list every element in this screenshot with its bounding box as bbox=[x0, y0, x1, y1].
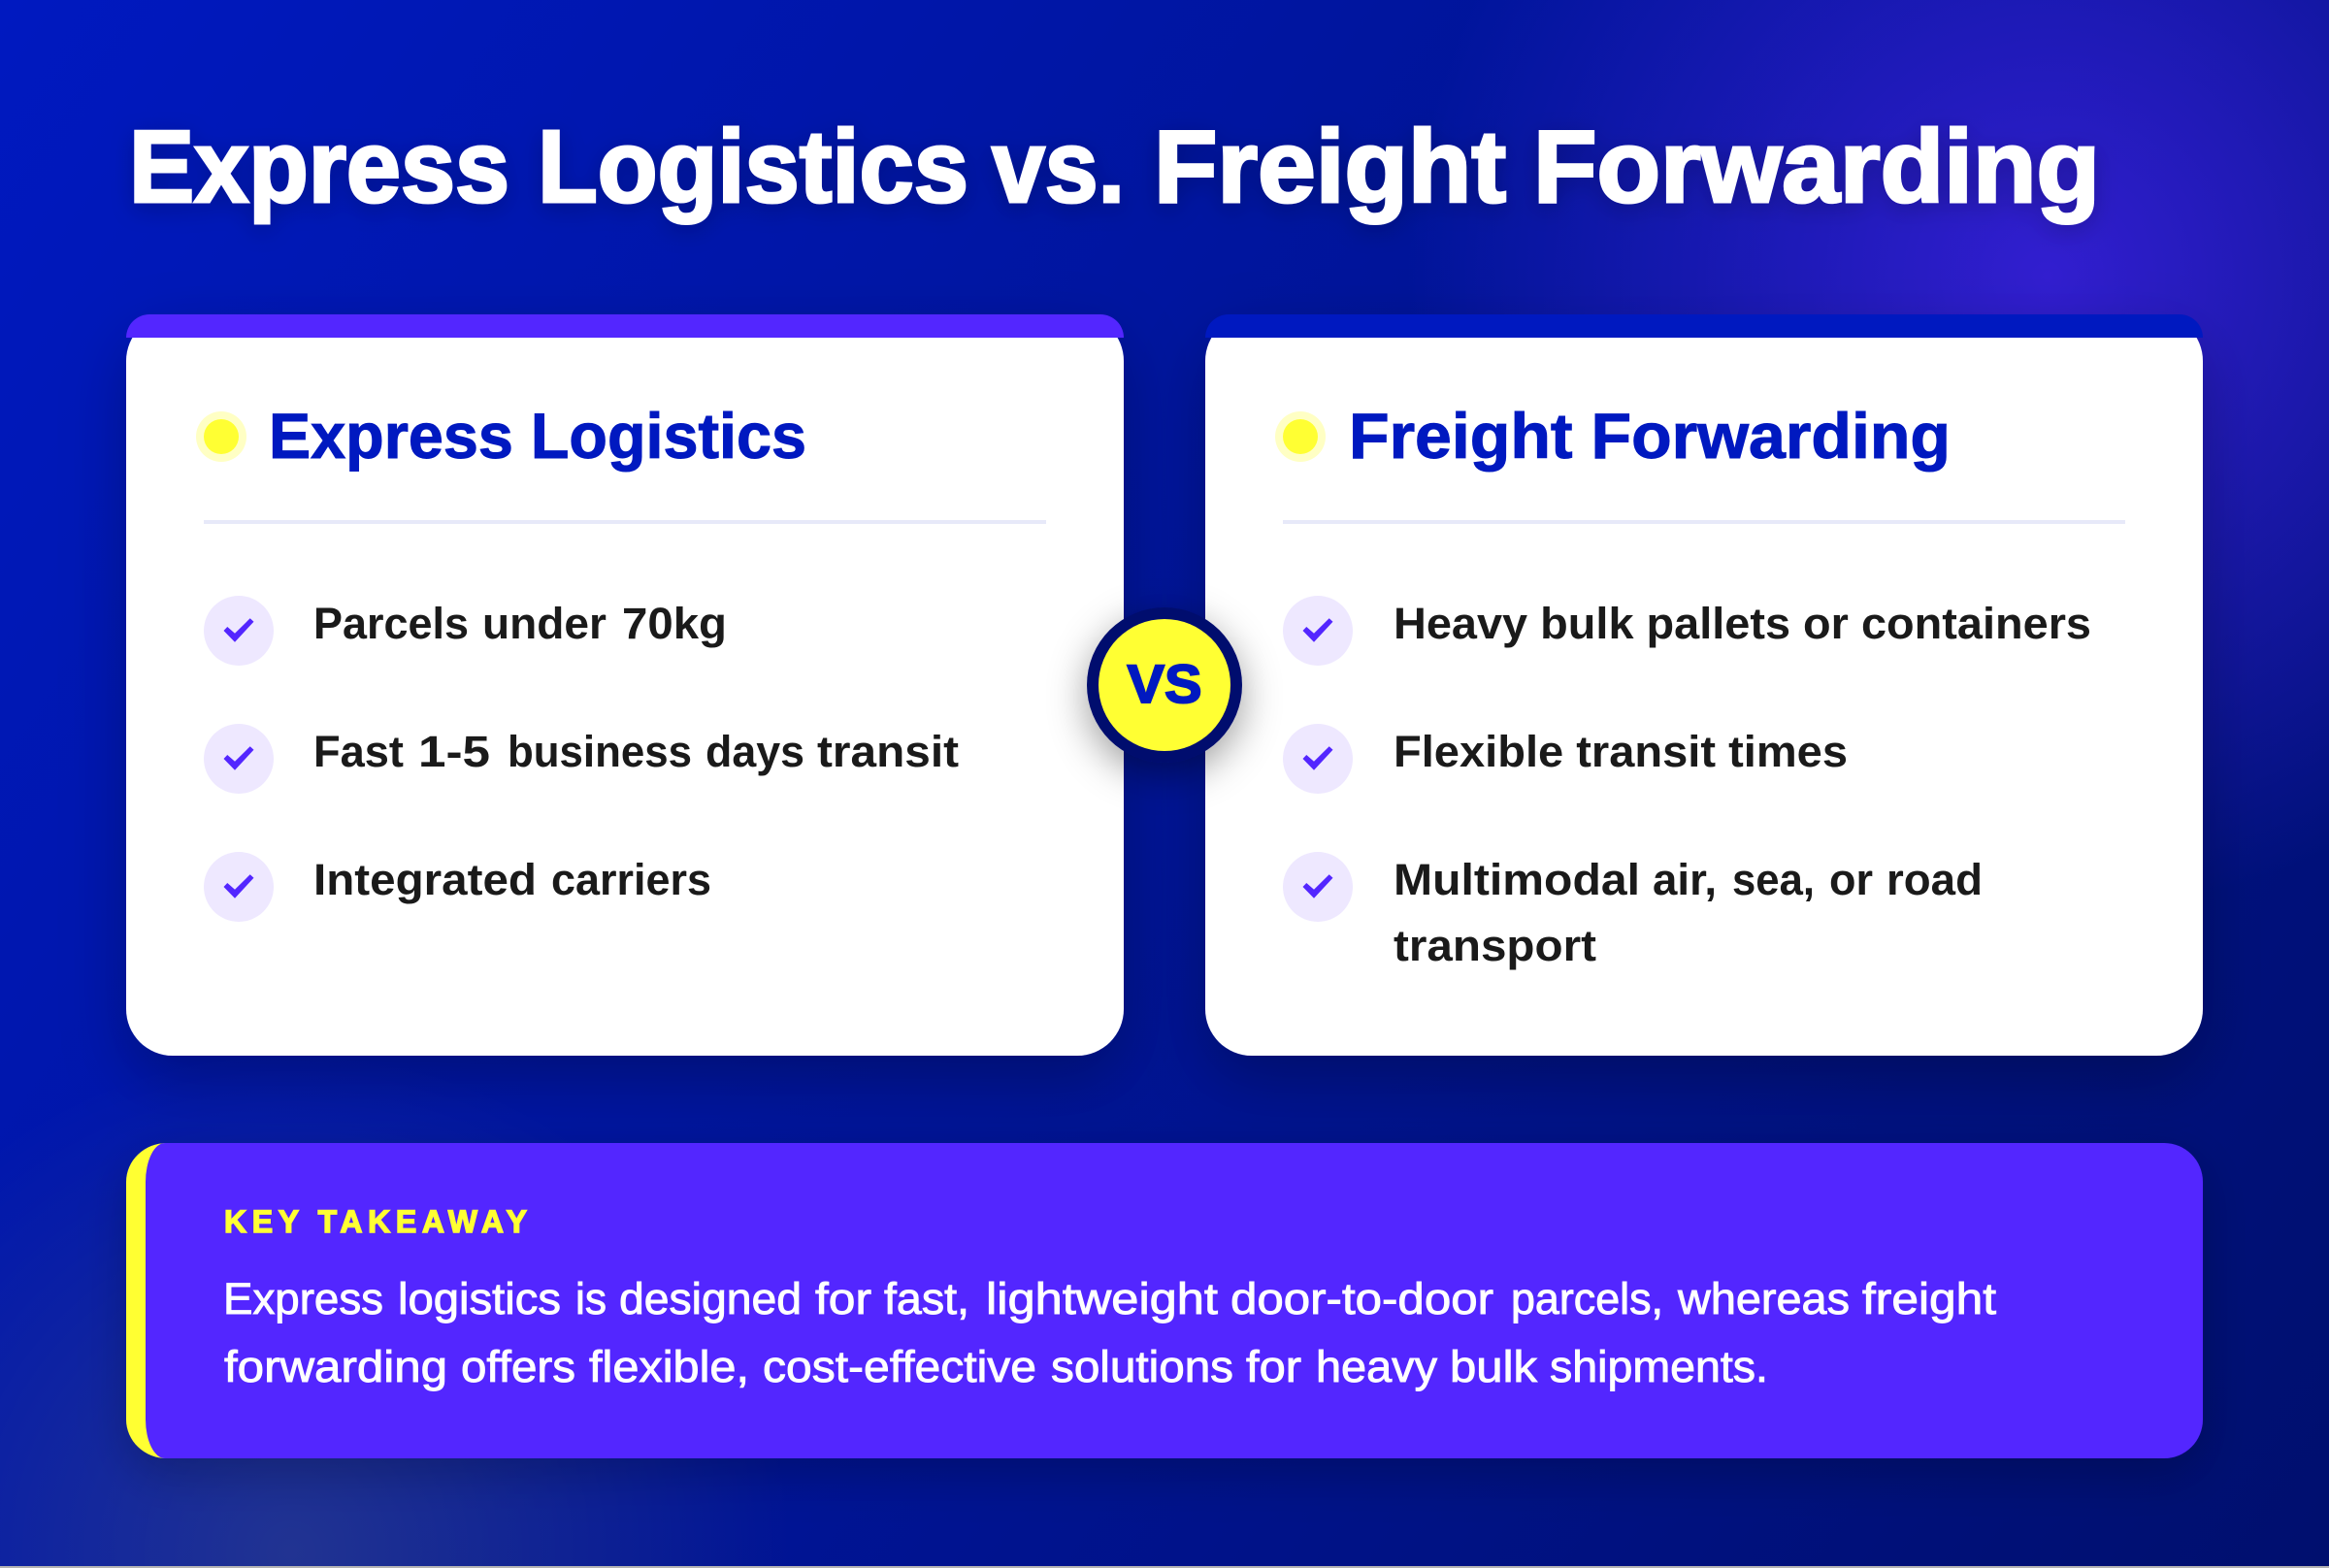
list item: flexible: Flexible transit times bbox=[1394, 727, 1848, 776]
takeaway text: parcels, bbox=[1511, 1274, 1663, 1323]
takeaway text: lightweight bbox=[986, 1274, 1219, 1323]
card top bar bbox=[1205, 314, 2203, 338]
card body bbox=[1205, 314, 2203, 1056]
takeaway text: fast, bbox=[884, 1274, 969, 1323]
list item: multimodal bbox=[1283, 852, 1983, 970]
takeaway text: freight bbox=[1862, 1274, 1997, 1323]
takeaway text: for bbox=[1246, 1342, 1301, 1391]
list item: carriers: Integrated bbox=[313, 855, 537, 904]
panel: express logistics bbox=[126, 314, 1124, 1056]
card top bar bbox=[126, 314, 1124, 338]
title: Logistics bbox=[538, 110, 968, 224]
heading: Express Logistics bbox=[269, 400, 806, 472]
list item: transit: 1-5 bbox=[418, 727, 490, 776]
list item: transit: days bbox=[705, 727, 804, 776]
takeaway text: forwarding bbox=[224, 1342, 447, 1391]
heading: Freight Forwarding bbox=[1349, 400, 1951, 472]
title: Forwarding bbox=[1533, 110, 2100, 224]
list item: bulk bbox=[1283, 596, 2091, 666]
card body bbox=[126, 314, 1124, 1056]
heading dot bbox=[1275, 411, 1326, 462]
list item: multimodal: transport bbox=[1394, 921, 1596, 970]
takeaway text bbox=[223, 1274, 1997, 1391]
list item: carriers: carriers bbox=[551, 855, 711, 904]
panel: key takeaway bbox=[126, 1143, 2203, 1458]
list item: carriers bbox=[204, 852, 711, 922]
heading dot bbox=[196, 411, 246, 462]
list item: parcels: under bbox=[482, 599, 607, 648]
takeaway text: designed bbox=[619, 1274, 802, 1323]
panel: freight forwarding bbox=[1205, 314, 2203, 1056]
takeaway text: door-to-door bbox=[1230, 1274, 1493, 1323]
list item: flexible bbox=[1283, 724, 1848, 794]
list item: multimodal: sea, bbox=[1732, 855, 1815, 904]
takeaway text: for bbox=[815, 1274, 871, 1323]
takeaway text: whereas bbox=[1677, 1274, 1850, 1323]
takeaway text: heavy bbox=[1316, 1342, 1438, 1391]
list item: parcels: Parcels bbox=[313, 599, 469, 648]
list item: transit: Fast bbox=[313, 727, 404, 776]
title: vs. bbox=[992, 110, 1125, 224]
list item: transit bbox=[204, 724, 959, 794]
list item: multimodal: Multimodal bbox=[1394, 855, 1640, 904]
title: Freight bbox=[1154, 110, 1506, 224]
takeaway label: KEY TAKEAWAY bbox=[224, 1204, 527, 1239]
vs badge: VS bbox=[1128, 653, 1201, 714]
list item: transit: transit bbox=[817, 727, 959, 776]
takeaway text: is bbox=[575, 1274, 607, 1323]
takeaway text: shipments. bbox=[1550, 1342, 1768, 1391]
list item: parcels: 70kg bbox=[622, 599, 727, 648]
takeaway text: logistics bbox=[398, 1274, 561, 1323]
takeaway text: cost-effective bbox=[763, 1342, 1036, 1391]
list item: parcels bbox=[204, 596, 727, 666]
takeaway text: offers bbox=[461, 1342, 575, 1391]
takeaway text: solutions bbox=[1051, 1342, 1233, 1391]
takeaway text: Express bbox=[223, 1274, 383, 1323]
takeaway text: bulk bbox=[1450, 1342, 1538, 1391]
takeaway text: flexible, bbox=[589, 1342, 749, 1391]
list item: multimodal: or bbox=[1829, 855, 1873, 904]
list item: multimodal: air, bbox=[1653, 855, 1717, 904]
list item: multimodal: road bbox=[1886, 855, 1983, 904]
list item: bulk: Heavy bulk pallets or containers bbox=[1394, 599, 2091, 648]
vs badge bbox=[1087, 607, 1242, 763]
title: Express bbox=[129, 110, 509, 224]
list item: transit: business bbox=[508, 727, 692, 776]
